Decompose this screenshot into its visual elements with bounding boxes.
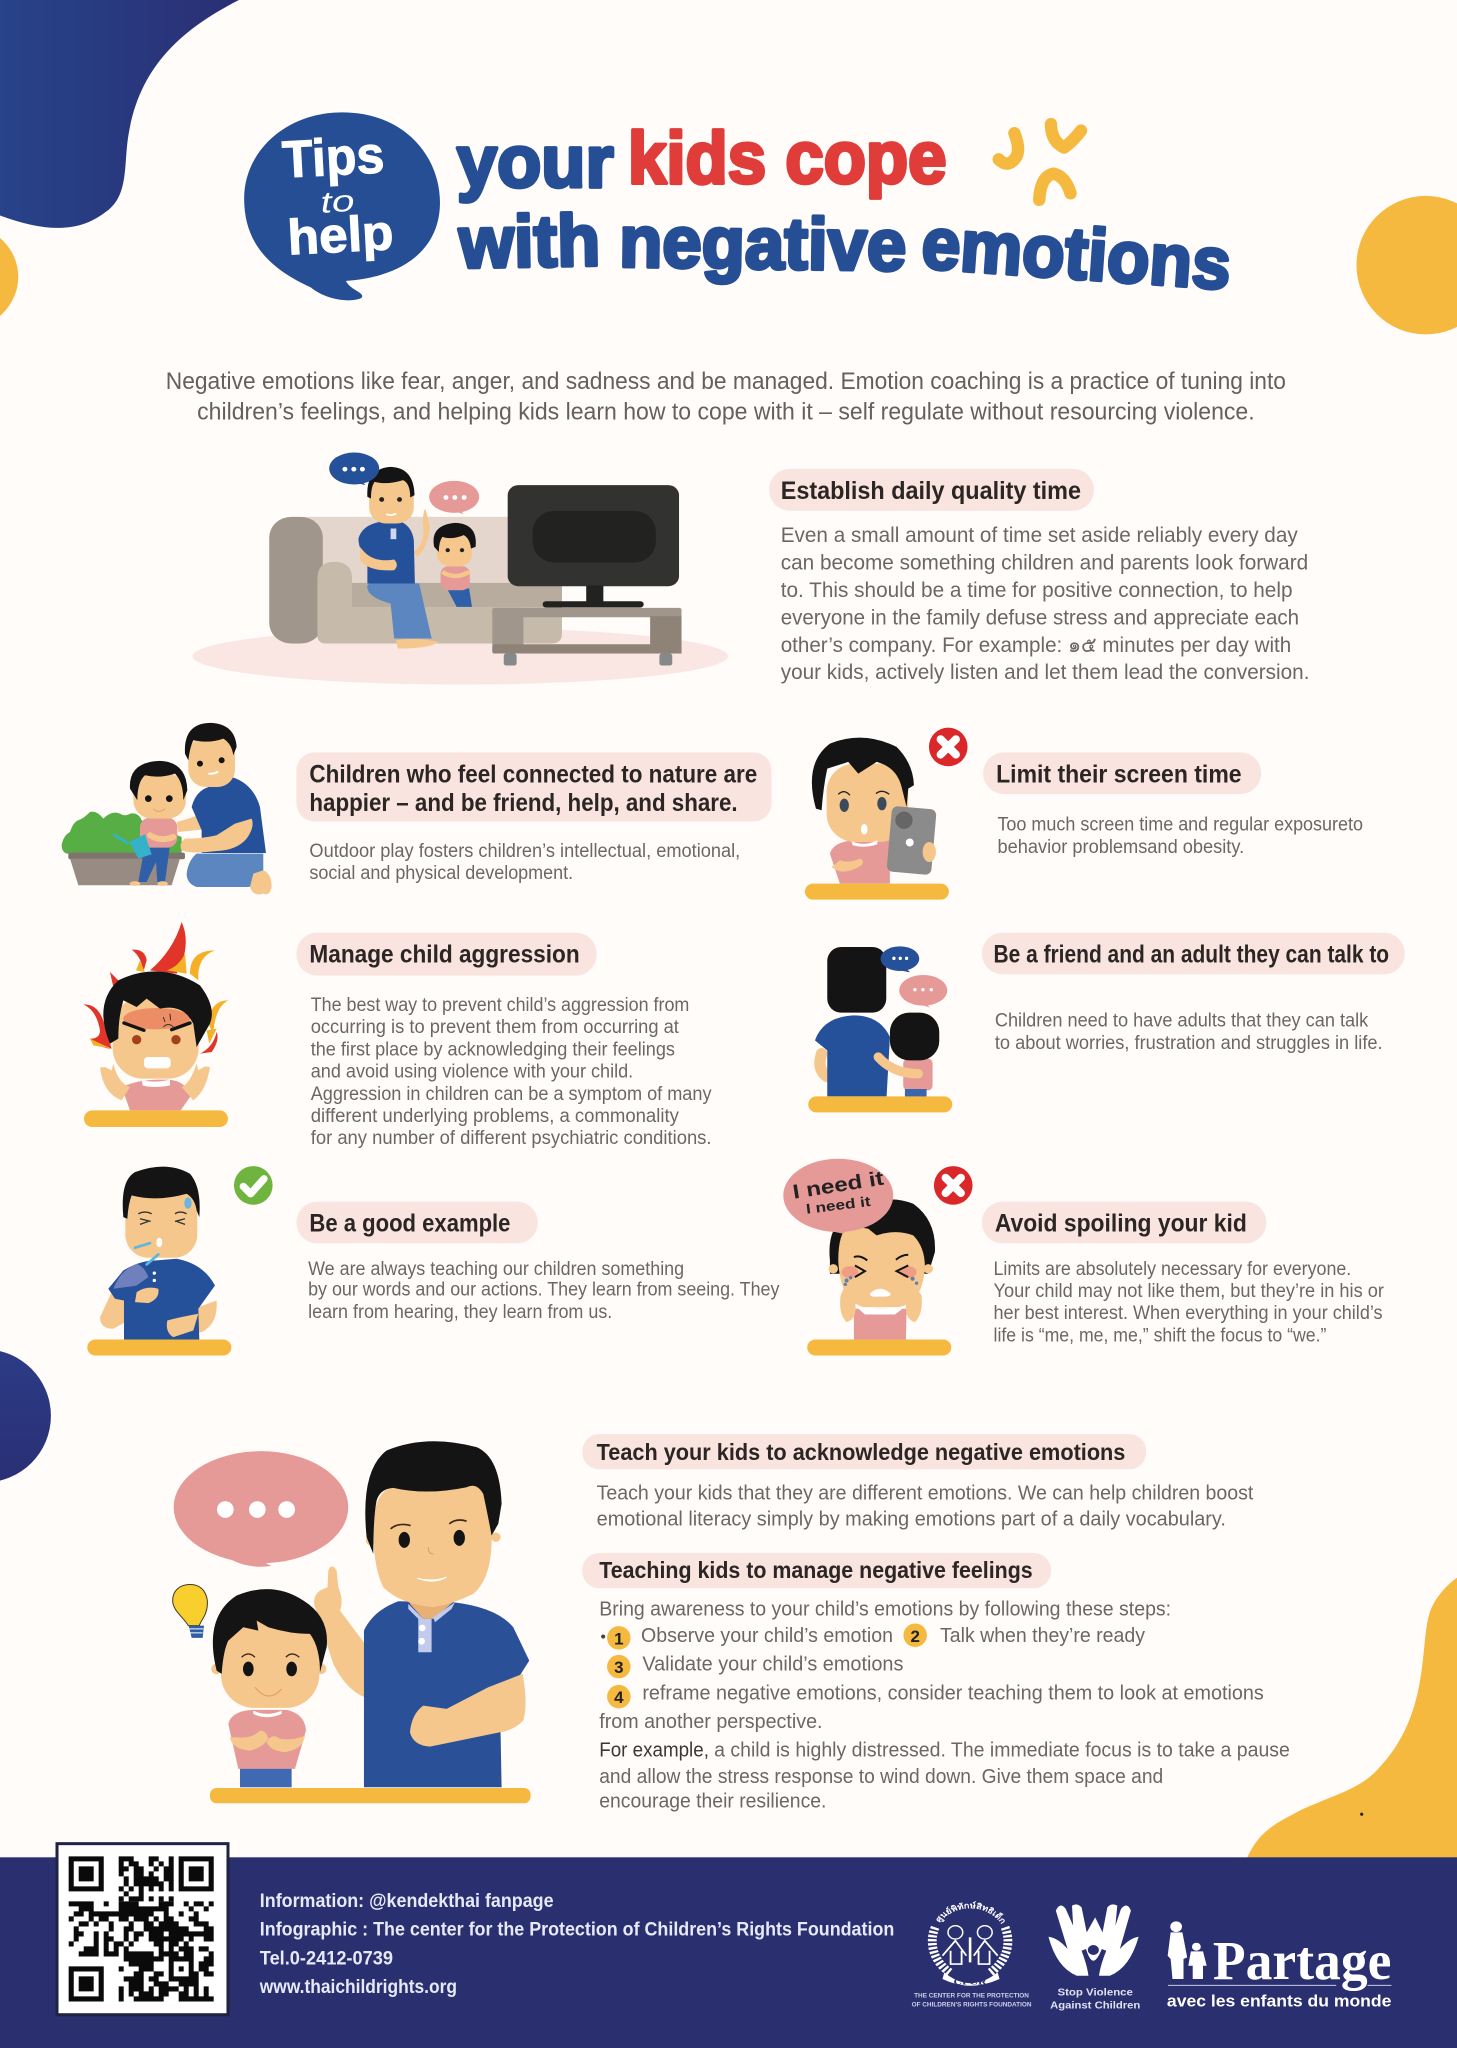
decorative blob: bottom right yellow	[1247, 1578, 1457, 1859]
heading pill: Be a good example	[309, 1211, 510, 1238]
steps list: Validate your child’s emotions	[642, 1654, 903, 1676]
icon: red cross	[934, 1166, 973, 1205]
speech bubble: Tips to help	[244, 112, 440, 300]
body text: the first place by acknowledging their feelings	[311, 1039, 675, 1060]
body text: your kids, actively listen and let them lead the conversion.	[781, 660, 1309, 684]
speech bubble: Tips to help: to	[319, 185, 356, 220]
decorative circle: right yellow	[1356, 196, 1457, 334]
body text	[781, 523, 1309, 684]
heading pill: Teaching kids to manage negative feelings	[599, 1557, 1033, 1583]
heading pill: Children who feel connected to nature are	[309, 761, 757, 788]
logo: Partage: avec les enfants du monde	[1167, 1991, 1392, 2010]
panel: be a good example	[296, 1202, 780, 1323]
logo: CPCR foundation: OF CHILDREN'S RIGHTS FOUNDATION	[912, 2002, 1032, 2009]
heading pill: Manage child aggression	[309, 942, 580, 969]
heading pill	[982, 1202, 1266, 1243]
steps list: 2	[910, 1627, 920, 1646]
heading pill	[769, 469, 1094, 511]
body text: for any number of different psychiatric conditions.	[311, 1128, 712, 1149]
body text: Limits are absolutely necessary for everyone.	[994, 1259, 1351, 1280]
panel: avoid spoiling your kid	[982, 1202, 1384, 1346]
icon: light bulb	[173, 1585, 207, 1638]
panel: establish daily quality time	[769, 469, 1309, 684]
heading pill: Limit their screen time	[996, 761, 1242, 788]
heading pill	[582, 1553, 1051, 1588]
example text: a child is highly distressed. The immediate focus is to take a pause	[714, 1740, 1290, 1762]
title line 1: kids cope	[628, 118, 947, 199]
example text: and allow the stress response to wind down. Give them space and	[599, 1766, 1163, 1788]
body text	[309, 841, 740, 884]
heading pill: Avoid spoiling your kid	[995, 1211, 1247, 1238]
steps list: 3	[614, 1658, 624, 1677]
body text: different underlying problems, a commonality	[311, 1106, 679, 1127]
decorative circle: left navy	[0, 1349, 51, 1482]
logo: CPCR foundation: CPCR	[954, 1977, 988, 1987]
speech bubble: Tips to help: Tips	[281, 126, 386, 190]
heading pill	[982, 933, 1405, 974]
body text: Children need to have adults that they can talk	[995, 1011, 1369, 1032]
body text: her best interest. When everything in your child’s	[994, 1303, 1383, 1324]
example text: encourage their resilience.	[599, 1791, 826, 1813]
logo: stop violence against children	[1048, 1904, 1140, 2011]
illustration: child with phone	[805, 728, 968, 900]
body text: life is “me, me, me,” shift the focus to “we.”	[994, 1325, 1326, 1346]
title line 1: your	[457, 122, 614, 203]
heading pill	[296, 1202, 538, 1243]
body text: emotional literacy simply by making emotions part of a daily vocabulary.	[597, 1509, 1226, 1531]
illustration: adult coughing into sleeve	[87, 1166, 273, 1355]
heading pill	[983, 752, 1261, 794]
heading pill	[296, 752, 772, 822]
heading pill: happier – and be friend, help, and share.	[309, 790, 738, 817]
example text	[599, 1740, 1290, 1813]
body text: and avoid using violence with your child.	[311, 1062, 633, 1083]
logo: CPCR foundation: ศูนย์พิทักษ์สิทธิเด็ก	[936, 1901, 1005, 1924]
panel: be a friend	[982, 933, 1405, 1054]
body text: behavior problemsand obesity.	[997, 837, 1244, 858]
footer contact text: www.thaichildrights.org	[259, 1977, 457, 1998]
icon: green check	[234, 1166, 273, 1205]
body text: Teach your kids that they are different emotions. We can help children boost	[597, 1482, 1254, 1504]
illustration: adult and child from behind talking	[808, 946, 952, 1112]
QR code	[57, 1844, 228, 2015]
footer contact text: Infographic : The center for the Protection of Children’s Rights Foundation	[260, 1920, 894, 1941]
illustration: crying child: I need it	[805, 1193, 872, 1217]
body text: occurring is to prevent them from occurring at	[311, 1017, 680, 1038]
decorative circle: left yellow	[0, 225, 18, 329]
body text: Too much screen time and regular exposureto	[997, 815, 1363, 836]
panel: connected to nature	[296, 752, 772, 884]
intro text	[166, 368, 1286, 425]
body text	[995, 1011, 1383, 1054]
body text: Aggression in children can be a symptom of many	[311, 1084, 712, 1105]
intro line: Bring awareness to your child’s emotions by following these steps:	[599, 1599, 1171, 1621]
example text: For example,	[599, 1740, 709, 1762]
illustration: father and child with speech bubble	[173, 1441, 531, 1803]
illustration: family on sofa watching tv	[192, 452, 728, 685]
illustration: angry child with flames	[83, 922, 228, 1127]
steps list: 4	[614, 1688, 624, 1707]
body text: learn from hearing, they learn from us.	[308, 1302, 612, 1323]
intro text: children’s feelings, and helping kids learn how to cope with it – self regulate without resourcing violence.	[197, 398, 1255, 425]
title line 2	[457, 200, 1234, 305]
icon: yellow squiggles	[999, 124, 1081, 200]
panel: teach your kids to acknowledge	[582, 1434, 1254, 1531]
illustration: crying child	[783, 1159, 973, 1355]
intro text: Negative emotions like fear, anger, and sadness and be managed. Emotion coaching is a practice of tuning into	[166, 368, 1286, 395]
steps list: 1	[614, 1629, 624, 1648]
heading pill	[582, 1434, 1146, 1469]
body text: The best way to prevent child’s aggression from	[311, 995, 689, 1016]
footer contact text: Tel.0-2412-0739	[260, 1948, 393, 1969]
body text: We are always teaching our children something	[308, 1259, 684, 1280]
footer contact text: Information: @kendekthai fanpage	[260, 1891, 554, 1912]
logo: CPCR foundation: THE CENTER FOR THE PROTECTION	[914, 1993, 1029, 2000]
body text	[311, 995, 712, 1149]
body text: Even a small amount of time set aside reliably every day	[781, 523, 1298, 547]
illustration: father and child gardening	[62, 723, 272, 894]
body text: by our words and our actions. They learn from seeing. They	[308, 1280, 780, 1301]
body text: social and physical development.	[309, 863, 573, 884]
body text: everyone in the family defuse stress and appreciate each	[781, 605, 1299, 629]
body text	[994, 1259, 1384, 1346]
steps list: from another perspective.	[599, 1711, 822, 1733]
heading pill: Teach your kids to acknowledge negative emotions	[597, 1439, 1125, 1465]
body text	[597, 1482, 1254, 1531]
title block	[244, 112, 1234, 305]
body text	[308, 1259, 780, 1323]
title line 2: negative	[619, 201, 907, 286]
steps list: reframe negative emotions, consider teaching them to look at emotions	[642, 1682, 1264, 1704]
panel: teaching kids to manage	[582, 1553, 1290, 1813]
logo: Partage: Partage	[1213, 1930, 1391, 1991]
title line 1	[457, 118, 947, 203]
small dot on yellow blob	[1360, 1813, 1363, 1816]
body text: to. This should be a time for positive connection, to help	[781, 578, 1293, 602]
heading pill	[296, 933, 597, 976]
heading pill: Be a friend and an adult they can talk to	[994, 942, 1389, 969]
footer band	[0, 1857, 1457, 2048]
illustration: crying child: I need it	[791, 1168, 886, 1204]
speech bubble: Tips to help: help	[286, 204, 395, 266]
logo: Partage	[1167, 1921, 1392, 2010]
body text: Outdoor play fosters children’s intellectual, emotional,	[309, 841, 740, 862]
logo: stop violence against children: Stop Violence	[1057, 1987, 1133, 1999]
footer contact text	[259, 1891, 894, 1998]
body text: to about worries, frustration and struggles in life.	[995, 1033, 1383, 1054]
heading pill: Establish daily quality time	[781, 478, 1081, 505]
steps list: Talk when they’re ready	[940, 1625, 1146, 1647]
panel: manage child aggression	[296, 933, 712, 1149]
logo: stop violence against children: Against Children	[1050, 2000, 1140, 2011]
body text: can become something children and parents look forward	[781, 550, 1308, 574]
decorative blob: top left navy	[0, 0, 239, 228]
steps list: Observe your child’s emotion	[641, 1625, 893, 1647]
title line 2: emotions	[919, 203, 1234, 305]
body text: other’s company. For example: ๑๕ minutes per day with	[781, 633, 1291, 657]
body text: Your child may not like them, but they’re in his or	[994, 1281, 1384, 1302]
steps list	[599, 1624, 1264, 1733]
icon: red cross	[929, 728, 968, 766]
logo: CPCR foundation	[912, 1901, 1032, 2009]
title line 2: with	[457, 200, 601, 284]
body text	[997, 815, 1363, 858]
panel: limit screen time	[983, 752, 1363, 858]
